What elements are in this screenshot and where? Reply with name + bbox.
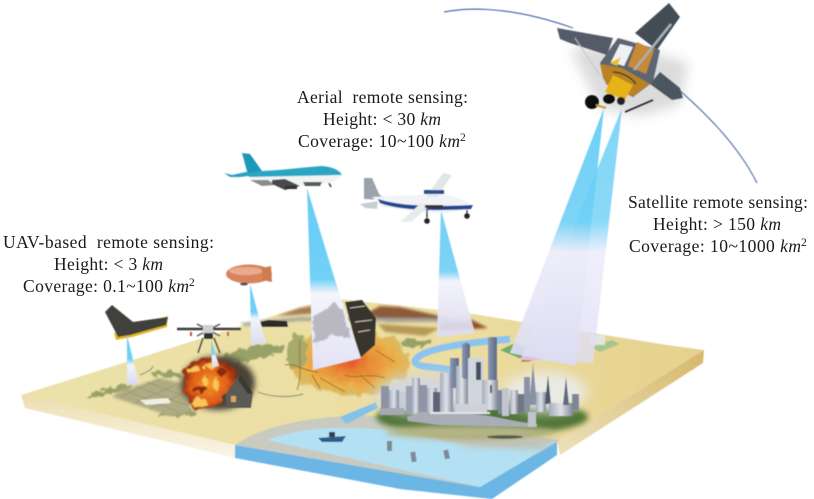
icon: satellite xyxy=(557,3,688,116)
icon: orbit path xyxy=(444,9,757,183)
satellite body xyxy=(600,38,660,97)
icon: fixed-wing beam xyxy=(127,335,139,385)
panel: jet beam with mountain image xyxy=(307,188,361,370)
text: aerial remote sensing label xyxy=(297,87,468,151)
panel: city xyxy=(375,337,588,439)
panel: farmhouse and lawn xyxy=(500,335,620,362)
text: aerial remote sensing label: Aerial remote sensing: xyxy=(297,87,468,107)
icon: blimp xyxy=(226,264,272,286)
text: satellite remote sensing label xyxy=(628,192,808,256)
panel: water body xyxy=(235,416,560,499)
icon: twin plane beam xyxy=(437,210,475,337)
text: aerial remote sensing label: Height: < 30 km xyxy=(323,109,441,129)
text: satellite remote sensing label: Satellite remote sensing: xyxy=(628,192,808,212)
text: satellite remote sensing label: Height: > 150 km xyxy=(653,214,781,234)
text: satellite remote sensing label: 2 xyxy=(801,237,807,249)
upper solar panel xyxy=(635,3,680,50)
text: UAV remote sensing label: UAV-based remote sensing: xyxy=(3,232,214,252)
icon: drone beam xyxy=(211,340,219,367)
icon: blimp beam xyxy=(250,284,266,345)
panel: burning house xyxy=(181,356,255,410)
icon: train on road xyxy=(260,320,288,327)
icon: fixed-wing UAV xyxy=(105,305,168,340)
icon: ship xyxy=(318,432,346,442)
text: aerial remote sensing label: 2 xyxy=(460,132,466,144)
text: UAV remote sensing label: 2 xyxy=(189,277,195,289)
icon: jet airliner xyxy=(224,153,342,190)
panel: farmland grid xyxy=(112,366,303,416)
text: aerial remote sensing label: Coverage: 10~100 km xyxy=(298,131,460,151)
text: UAV remote sensing label xyxy=(3,232,214,296)
lower solar panel xyxy=(650,72,683,100)
icon: quadcopter drone xyxy=(177,324,241,353)
text: UAV remote sensing label: Coverage: 0.1~100 km xyxy=(23,276,189,296)
text: UAV remote sensing label: Height: < 3 km xyxy=(54,254,163,274)
icon: twin-engine plane xyxy=(360,173,473,224)
panel: terrain slab xyxy=(21,298,704,487)
text: satellite remote sensing label: Coverage: 10~1000 km xyxy=(629,236,801,256)
panel: mountain terrain xyxy=(285,300,410,395)
panel: river xyxy=(340,339,510,424)
panel: satellite beams xyxy=(510,108,622,366)
panel: back hills and road xyxy=(240,304,488,336)
icon: moored boats xyxy=(387,441,450,462)
skyscrapers xyxy=(380,337,579,427)
left solar panel xyxy=(557,28,613,55)
panel: shrub patches xyxy=(86,339,431,416)
